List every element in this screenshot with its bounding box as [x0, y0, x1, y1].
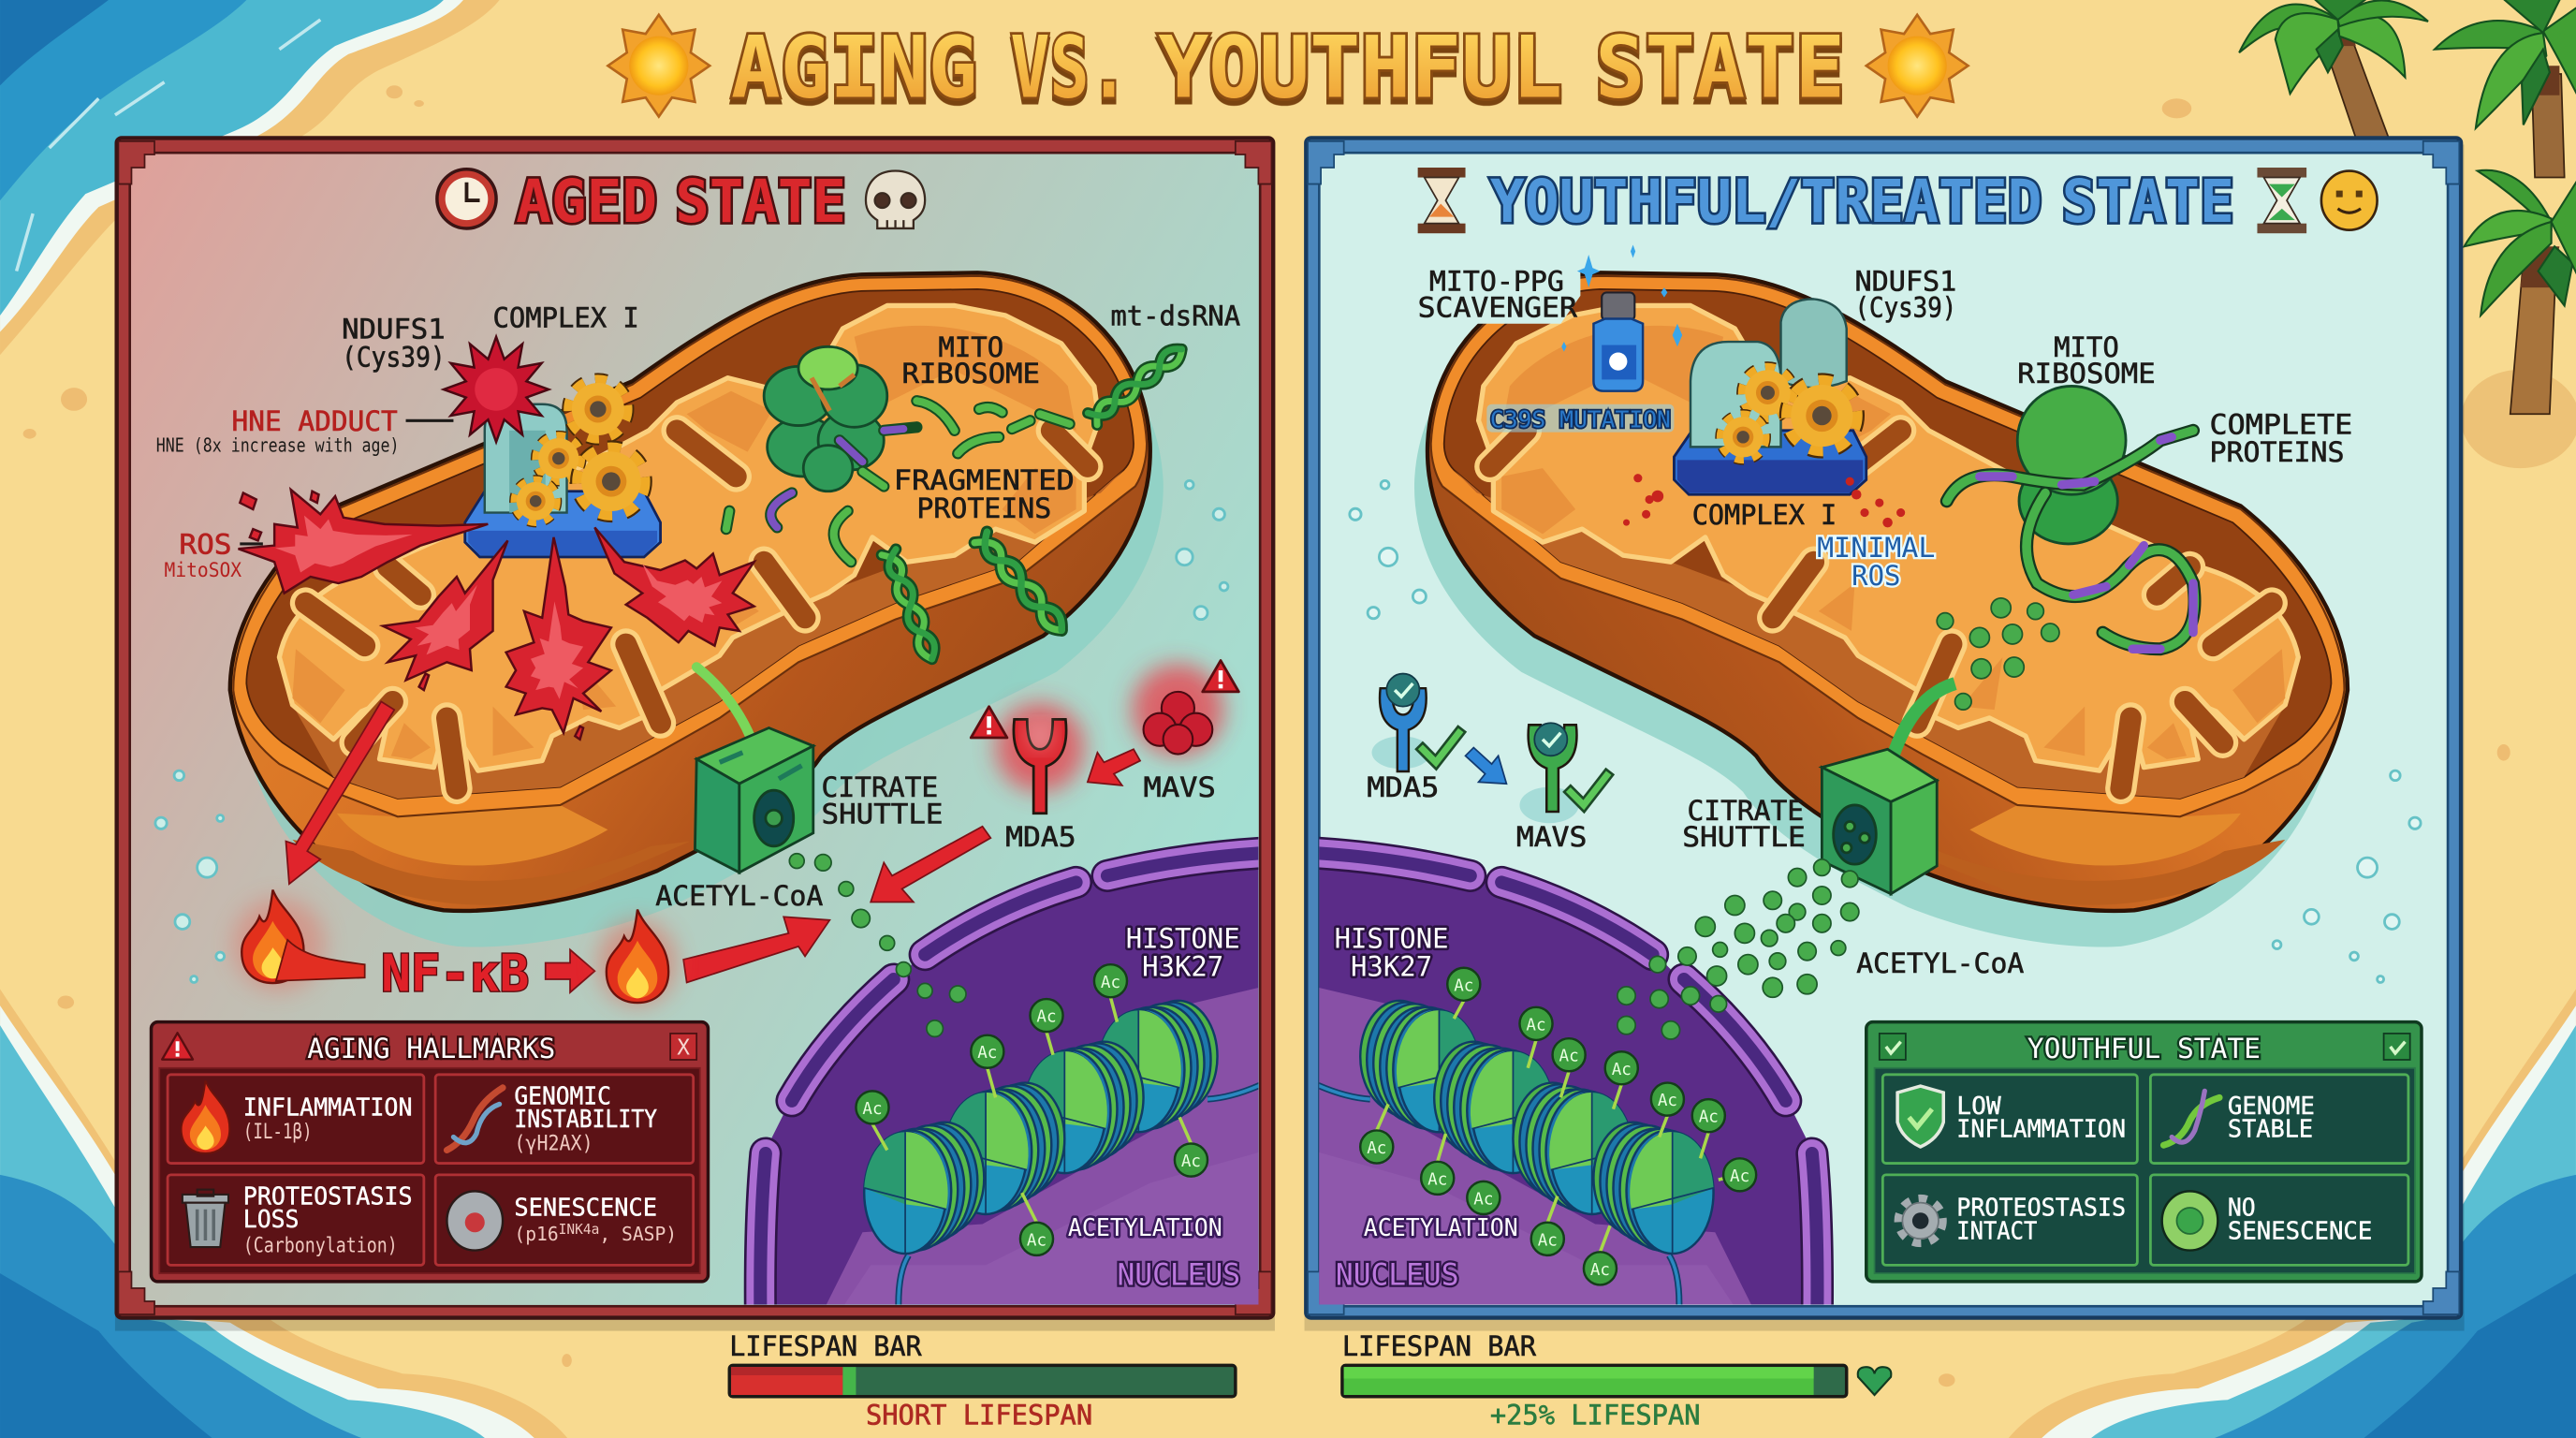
cell: no senescence: SENESCENCE: [2228, 1216, 2372, 1244]
complex I left: [465, 381, 661, 557]
label mito ribosome: MITO: [938, 331, 1003, 363]
cell: inflammation: INFLAMMATION: [243, 1093, 413, 1122]
label citrate shuttle: CITRATE: [1687, 795, 1804, 827]
label MitoSOX: MitoSOX: [165, 558, 242, 581]
Ac badges left: Ac: [862, 1100, 883, 1119]
label MAVS: MAVS: [1144, 771, 1216, 803]
label histone: H3K27: [1142, 950, 1223, 982]
acetyl-CoA dots right: [1617, 598, 2059, 1039]
Ac badges right: Ac: [1427, 1170, 1447, 1189]
label citrate shuttle: [822, 771, 943, 829]
inflammation flames: [233, 890, 677, 1005]
label MDA5: MDA5: [1367, 771, 1439, 803]
label citrate shuttle: CITRATE: [822, 771, 938, 803]
Ac badges right: Ac: [1612, 1061, 1632, 1079]
label citrate shuttle: SHUTTLE: [1682, 821, 1806, 853]
label nucleus: NUCLEUS: [1117, 1258, 1240, 1292]
cell: low inflammation: [1882, 1075, 2137, 1164]
label ROS: [179, 528, 263, 560]
label histone: HISTONE: [1335, 923, 1449, 955]
label citrate shuttle: [1682, 795, 1806, 853]
cell: genome stable: STABLE: [2228, 1114, 2313, 1142]
icon: flame: [182, 1080, 229, 1153]
label complex I: COMPLEX I: [1692, 499, 1837, 531]
label mito ribosome: RIBOSOME: [902, 358, 1040, 389]
cell: proteostasis intact: PROTEOSTASIS: [1956, 1194, 2126, 1222]
label mito-PPG scavenger: MITO-PPG: [1429, 266, 1564, 298]
icon: sun left: [607, 15, 710, 117]
label complete proteins: PROTEINS: [2210, 436, 2344, 468]
cell: low inflammation: INFLAMMATION: [1956, 1114, 2126, 1142]
panel: youthful state box: [1866, 1022, 2422, 1282]
heading text: STATE: [2062, 167, 2234, 236]
bubbles right: [1350, 480, 2421, 983]
mtRNA helix lower 2: [974, 532, 1068, 636]
MDA5 receptor red: [996, 703, 1084, 814]
cell: genomic instability: [435, 1075, 694, 1164]
label: LIFESPAN BAR: [1342, 1330, 1537, 1362]
label NDUFS1: (Cys39): [1854, 292, 1956, 324]
icon: warning: [162, 1033, 193, 1060]
label MAVS: MAVS: [1516, 821, 1587, 853]
label ROS: ROS: [179, 528, 232, 560]
label complex I: COMPLEX I: [493, 301, 639, 333]
Ac badges left: [856, 964, 1208, 1255]
Ac badges right: Ac: [1473, 1190, 1493, 1209]
nucleus left: [760, 853, 1266, 1331]
label backing: mito-PPG: [1410, 263, 1580, 324]
Ac badges right: Ac: [1538, 1231, 1558, 1250]
label NDUFS1: NDUFS1: [342, 314, 446, 345]
Ac badges left: Ac: [977, 1044, 997, 1063]
Ac badges right: Ac: [1590, 1261, 1610, 1280]
cell: proteostasis intact: [1882, 1175, 2137, 1265]
label mito ribosome: MITO: [2054, 331, 2119, 363]
label complete proteins: [2210, 408, 2352, 468]
lifespan bar left: [729, 1330, 1236, 1431]
label Cys39: (Cys39): [342, 341, 446, 373]
icon: heart: [1858, 1367, 1891, 1395]
label histone: HISTONE: [1126, 923, 1240, 955]
title text: STATE: [1595, 18, 1845, 118]
label mito ribosome: [2017, 331, 2156, 389]
acetyl-CoA dots left: [789, 854, 966, 1036]
hallmarks title: AGING HALLMARKS: [307, 1033, 555, 1064]
icon: skull: [866, 171, 925, 228]
label MDA5: MDA5: [1005, 821, 1076, 853]
check box right: [2384, 1034, 2410, 1060]
label acetylation: ACETYLATION: [1068, 1213, 1222, 1241]
heading text: STATE: [675, 167, 846, 236]
title text: VS.: [1010, 18, 1129, 118]
Ac badges left: Ac: [1181, 1152, 1201, 1171]
warning icons: [971, 661, 1238, 738]
Ac badges right: Ac: [1367, 1139, 1386, 1158]
panel heading: aged state: [437, 167, 925, 236]
Ac badges right: Ac: [1454, 976, 1473, 995]
label citrate shuttle: SHUTTLE: [822, 798, 943, 829]
bubbles left: [155, 480, 1228, 983]
C39S mutation chip: C39S MUTATION: [1490, 405, 1671, 433]
ROS bursts: [239, 490, 754, 740]
label HNE note: HNE (8x increase with age): [156, 434, 400, 457]
icon: hourglass green: [2257, 168, 2306, 233]
mt-dsRNA helix: [1088, 344, 1187, 425]
cell: genomic instability: INSTABILITY: [514, 1105, 657, 1133]
cell: no senescence: NO: [2228, 1194, 2256, 1222]
icon: clock: [437, 169, 496, 228]
cell: low inflammation: LOW: [1956, 1092, 2001, 1120]
icon: shield: [1897, 1086, 1943, 1147]
label minimal ROS: ROS: [1852, 560, 1900, 592]
panel: youthful state: [1305, 138, 2465, 1331]
box title: YOUTHFUL STATE: [2027, 1033, 2261, 1064]
label histone: [1126, 923, 1240, 982]
cell: senescence: INK4a: [559, 1221, 599, 1238]
Ac badges left: Ac: [1036, 1008, 1057, 1027]
close button: X: [677, 1036, 690, 1061]
cell: genomic instability: GENOMIC: [514, 1081, 611, 1109]
mitochondrion right: [1414, 272, 2348, 947]
label mito-PPG scavenger: SCAVENGER: [1418, 292, 1578, 324]
label histone: [1335, 923, 1449, 982]
caption: +25% LIFESPAN: [1490, 1400, 1701, 1431]
label fragmented proteins: [894, 464, 1075, 524]
title: [607, 15, 1969, 118]
cell: proteostasis loss: LOSS: [243, 1205, 299, 1233]
vial mito-PPG: [1561, 244, 1682, 391]
citrate shuttle cube right: [1822, 683, 1955, 894]
ocean bottom-left: [0, 990, 568, 1438]
label mito ribosome: RIBOSOME: [2017, 358, 2156, 389]
mtRNA helix lower 1: [882, 550, 939, 662]
MAVS receptor green: [1519, 723, 1579, 823]
check box left: [1880, 1034, 1906, 1060]
mito ribosome healthy: [2017, 386, 2126, 544]
Ac badges right: Ac: [1526, 1016, 1546, 1034]
icon: DNA green: [2163, 1091, 2219, 1145]
panel: aged state: [115, 138, 1275, 1331]
complete protein strands: [1947, 431, 2194, 649]
Ac badges right: Ac: [1699, 1108, 1719, 1127]
complex I right: [1674, 299, 1866, 494]
label fragmented proteins: PROTEINS: [916, 492, 1051, 524]
cell: proteostasis loss: (Carbonylation): [243, 1234, 398, 1257]
arrow: MDA5 to MAVS: [1466, 748, 1506, 784]
label fragmented proteins: FRAGMENTED: [894, 464, 1075, 496]
label acetyl-CoA: ACETYL-CoA: [1856, 947, 2024, 979]
labels left: [156, 300, 1240, 1292]
icon: sun right: [1866, 15, 1969, 117]
Ac badges left: Ac: [1027, 1231, 1046, 1250]
heading text: YOUTHFUL/TREATED: [1490, 167, 2042, 236]
labels right: [1335, 266, 2352, 1292]
check marks: [1423, 733, 1606, 805]
Ac badges right: Ac: [1658, 1092, 1677, 1110]
cell: proteostasis loss: [168, 1175, 424, 1265]
panel: aging hallmarks: [152, 1022, 708, 1282]
cell: genome stable: GENOME: [2228, 1092, 2315, 1120]
bar: [729, 1365, 1236, 1397]
minimal ROS dots: [1623, 474, 1905, 527]
label NDUFS1: NDUFS1: [1854, 266, 1956, 298]
cell: genome stable: [2150, 1075, 2408, 1164]
heading text: AGED: [516, 167, 657, 236]
icon: smiley: [2321, 171, 2378, 230]
caption: SHORT LIFESPAN: [866, 1400, 1092, 1431]
arrows: red: [285, 701, 1140, 992]
icon: hourglass orange: [1418, 168, 1466, 233]
icon: senescent cell: [446, 1191, 503, 1251]
MDA5 receptor blue: [1372, 674, 1431, 771]
cell: inflammation: (IL-1β): [243, 1121, 313, 1144]
label complete proteins: COMPLETE: [2210, 408, 2352, 440]
icon: DNA red: [446, 1088, 503, 1151]
cell: proteostasis intact: INTACT: [1956, 1216, 2037, 1244]
cell: senescence: SENESCENCE: [514, 1194, 657, 1222]
label minimal ROS: [1817, 532, 1935, 592]
label histone: H3K27: [1351, 950, 1432, 982]
Ac badges right: [1360, 968, 1756, 1284]
label NDUFS1: [1854, 266, 1956, 324]
cell: genomic instability: (γH2AX): [514, 1133, 593, 1156]
ocean bottom-right: [2008, 990, 2576, 1438]
cell: senescence: (p16: [514, 1223, 560, 1245]
citrate shuttle cube left: [695, 668, 813, 873]
title text: YOUTHFUL: [1158, 18, 1562, 118]
label acetylation: ACETYLATION: [1364, 1213, 1518, 1241]
ocean top-left: [0, 0, 500, 355]
Ac badges right: Ac: [1559, 1048, 1579, 1066]
icon: grey gear: [1899, 1199, 1942, 1242]
label acetyl-CoA: ACETYL-CoA: [655, 880, 823, 912]
panel heading: youthful: [1418, 167, 2378, 236]
cell: senescence: [435, 1175, 694, 1265]
mitochondrion left: [230, 272, 1164, 947]
NDUFS1 HNE burst: [444, 337, 549, 442]
cell: inflammation: [168, 1075, 424, 1164]
cell: no senescence: [2150, 1175, 2408, 1265]
mito ribosome broken: [764, 346, 887, 492]
label HNE adduct: HNE ADDUCT: [232, 405, 398, 437]
NF-kB label: NF-κB: [381, 944, 529, 1003]
label mito ribosome: [902, 331, 1040, 389]
label nucleus: NUCLEUS: [1336, 1258, 1459, 1292]
bar: [1342, 1365, 1847, 1397]
label mito-PPG scavenger: [1418, 266, 1578, 324]
icon: healthy cell: [2162, 1191, 2217, 1251]
palm trees: [2239, 0, 2576, 468]
Ac badges left: Ac: [1101, 974, 1120, 992]
cell: senescence: , SASP): [599, 1223, 677, 1245]
Ac badges right: Ac: [1730, 1167, 1749, 1186]
title text: AGING: [731, 18, 977, 118]
cell: proteostasis loss: PROTEOSTASIS: [243, 1181, 413, 1210]
label: LIFESPAN BAR: [729, 1330, 922, 1362]
lifespan bar right: [1342, 1330, 1891, 1431]
nucleus right: [1311, 853, 1817, 1331]
label mt-dsRNA: mt-dsRNA: [1110, 300, 1240, 331]
MAVS cluster red: [1132, 664, 1224, 756]
fragmented proteins: [726, 401, 1070, 562]
icon: trash can: [183, 1190, 228, 1247]
label minimal ROS: MINIMAL: [1817, 532, 1935, 564]
close button: [670, 1034, 696, 1061]
